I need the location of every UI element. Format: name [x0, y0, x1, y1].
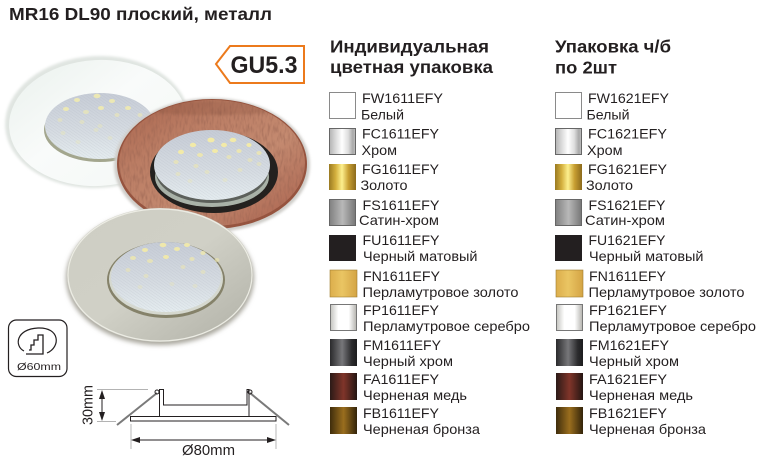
heading: individual colour packaging: Индивидуальная: [330, 36, 489, 56]
icon: cut-out Ø60mm: [8, 320, 67, 376]
item: FC1611EFY: [330, 126, 440, 158]
badge: GU5.3: GU5.3: [230, 52, 298, 79]
item: FB1611EFY: [330, 406, 480, 437]
item: FS1611EFY: FS1611EFY: [362, 198, 440, 214]
item: FN1611EFY: [556, 269, 745, 300]
item: FC1621EFY: [556, 126, 668, 158]
item: FS1621EFY: FS1621EFY: [588, 198, 666, 214]
item: FC1621EFY: Хром: [587, 142, 622, 158]
lamp: satin chrome: [66, 208, 254, 345]
item: FU1621EFY: FU1621EFY: [588, 233, 666, 249]
label: 30mm: 30mm: [80, 385, 96, 425]
item: FA1611EFY: Черненая медь: [363, 387, 467, 403]
item: FM1611EFY: [330, 338, 453, 369]
item: FU1621EFY: [555, 233, 704, 264]
item: FS1621EFY: Сатин-хром: [585, 212, 665, 228]
item: FB1621EFY: FB1621EFY: [589, 406, 668, 422]
lamp: white: [2, 51, 192, 193]
item: FW1611EFY: Белый: [361, 106, 404, 122]
dimension drawing: [80, 385, 289, 459]
item: FN1611EFY: Перламутровое золото: [362, 284, 519, 300]
item: FS1621EFY: [556, 198, 666, 228]
item: FU1621EFY: Черный матовый: [589, 248, 704, 264]
item: FP1611EFY: [330, 303, 530, 334]
item: FM1611EFY: FM1611EFY: [363, 338, 442, 354]
title: MR16 DL90 плоский, металл: [9, 4, 272, 24]
item: FB1611EFY: Черненая бронза: [363, 421, 480, 437]
item: FA1621EFY: Черненая медь: [589, 387, 693, 403]
item: FA1611EFY: [330, 372, 467, 403]
item: FP1611EFY: FP1611EFY: [363, 303, 440, 319]
item: FA1621EFY: [556, 372, 693, 403]
item: FB1621EFY: [556, 406, 706, 437]
item: FG1621EFY: FG1621EFY: [588, 162, 668, 178]
item: FC1621EFY: FC1621EFY: [588, 126, 668, 142]
item: FP1611EFY: Перламутровое серебро: [363, 318, 530, 334]
heading: b/w packaging: [555, 36, 671, 78]
item: FW1611EFY: FW1611EFY: [362, 91, 444, 107]
item: FN1611EFY: [330, 269, 519, 300]
item: FC1611EFY: FC1611EFY: [362, 126, 440, 142]
item: FM1611EFY: Черный хром: [363, 353, 453, 369]
lamp: copper: [114, 98, 310, 233]
item: FW1621EFY: [556, 91, 670, 122]
item: FU1611EFY: Черный матовый: [363, 248, 478, 264]
heading: individual colour packaging: цветная упаковка: [330, 57, 493, 77]
item: FB1621EFY: Черненая бронза: [589, 421, 706, 437]
item: FG1621EFY: [555, 162, 668, 193]
heading: b/w packaging: Упаковка ч/б: [555, 36, 671, 56]
item: FA1611EFY: FA1611EFY: [363, 372, 440, 388]
badge: GU5.3: [216, 46, 304, 83]
item: FN1611EFY: FN1611EFY: [363, 269, 441, 285]
item: FM1621EFY: [556, 338, 679, 369]
item: FW1621EFY: Белый: [586, 106, 630, 122]
item: FS1611EFY: [330, 198, 440, 228]
heading: individual colour packaging: [330, 36, 493, 77]
label: Ø80mm: Ø80mm: [182, 443, 235, 459]
item: FW1611EFY: [330, 91, 444, 122]
item: FP1621EFY: FP1621EFY: [589, 303, 668, 319]
list: individual packaging colours: [329, 91, 530, 437]
list: b/w packaging colours: [555, 91, 756, 437]
item: FN1611EFY: FN1611EFY: [589, 269, 667, 285]
item: FG1621EFY: Золото: [586, 177, 633, 193]
item: FG1611EFY: Золото: [360, 177, 408, 193]
heading: b/w packaging: по 2шт: [555, 58, 617, 78]
icon: cut-out Ø60mm: Ø60mm: [17, 361, 61, 373]
item: FB1611EFY: FB1611EFY: [363, 406, 440, 422]
item: FG1611EFY: [329, 162, 440, 193]
item: FN1611EFY: Перламутровое золото: [588, 284, 745, 300]
item: FC1611EFY: Хром: [362, 142, 397, 158]
item: FP1621EFY: [556, 303, 756, 334]
item: FM1621EFY: FM1621EFY: [589, 338, 670, 354]
item: FS1611EFY: Сатин-хром: [359, 212, 439, 228]
photo: three downlights: [2, 51, 310, 345]
item: FP1621EFY: Перламутровое серебро: [589, 318, 756, 334]
item: FM1621EFY: Черный хром: [589, 353, 679, 369]
item: FW1621EFY: FW1621EFY: [588, 91, 670, 107]
item: FU1611EFY: [329, 233, 478, 264]
item: FA1621EFY: FA1621EFY: [589, 372, 668, 388]
item: FG1611EFY: FG1611EFY: [362, 162, 440, 178]
item: FU1611EFY: FU1611EFY: [362, 233, 440, 249]
